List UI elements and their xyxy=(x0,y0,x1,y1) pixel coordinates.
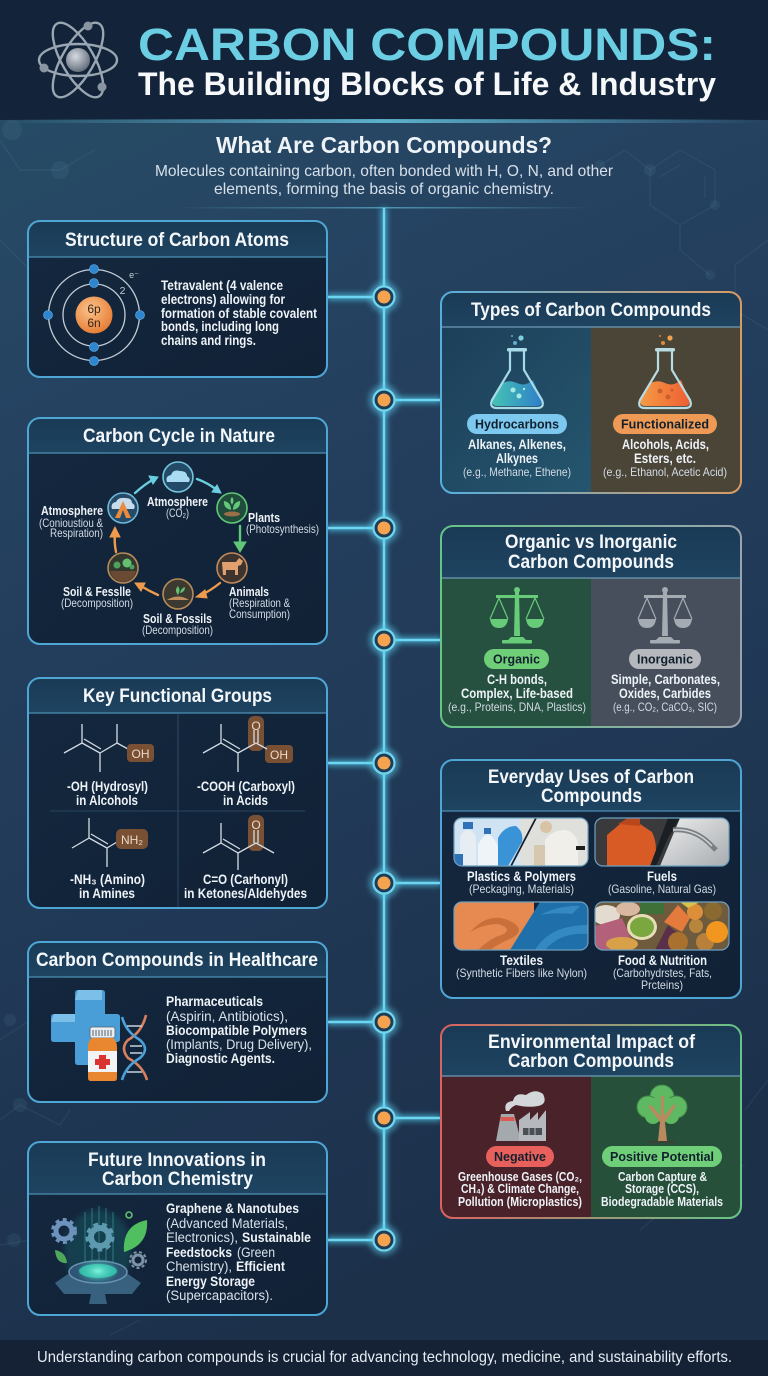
hydrocarbons column: Alkynes xyxy=(496,451,538,466)
amino structure: NH₂ xyxy=(121,833,143,847)
amino structure xyxy=(72,818,148,867)
panel: environmental impact xyxy=(441,1025,741,1218)
heading: Carbon Cycle in Nature xyxy=(83,426,275,447)
cycle labels: Soil & Fesslle xyxy=(63,585,131,599)
description: (Implants, Drug Delivery), xyxy=(166,1037,312,1052)
positive column: Storage (CCS), xyxy=(625,1182,699,1196)
positive column: Biodegradable Materials xyxy=(601,1195,723,1209)
icon: combustion xyxy=(108,493,138,523)
subtitle: The Building Blocks of Life & Industry xyxy=(138,66,716,102)
group labels: in Amines xyxy=(79,886,135,901)
cycle labels: Atmosphere xyxy=(41,504,103,518)
heading: Environmental Impact of xyxy=(488,1032,696,1053)
intro block: Molecules containing carbon, often bonded with H, O, N, and other xyxy=(155,163,614,180)
description: bonds, including long xyxy=(161,319,279,334)
footer: Understanding carbon compounds is crucial for advancing technology, medicine, and sustainability efforts. xyxy=(37,1349,732,1366)
negative column: Negative xyxy=(494,1149,546,1164)
carbonyl structure: O xyxy=(251,818,261,832)
organic column: Complex, Life-based xyxy=(461,686,573,701)
heading: Carbon Compounds xyxy=(508,1051,674,1072)
cycle labels: (Decomposition) xyxy=(142,623,213,637)
image: textiles xyxy=(454,902,588,950)
heading xyxy=(505,532,677,573)
functionalized column: (e.g., Ethanol, Acetic Acid) xyxy=(603,465,727,479)
icon: carbon atom diagram: 6n xyxy=(87,316,101,330)
description: Diagnostic Agents. xyxy=(166,1051,275,1066)
inorganic column: (e.g., CO₂, CaCO₃, SIC) xyxy=(613,700,717,714)
carbonyl structure xyxy=(203,815,274,870)
use labels: Food & Nutrition xyxy=(618,953,707,968)
panel: carbon cycle in nature xyxy=(28,418,327,644)
icon: atmosphere cloud xyxy=(163,462,193,492)
hydroxyl structure: OH xyxy=(132,747,150,761)
icon: factory xyxy=(496,1091,546,1141)
positive column: Carbon Capture & xyxy=(618,1170,707,1184)
positive column: Positive Potential xyxy=(610,1149,714,1164)
description: Tetravalent (4 valence xyxy=(161,278,283,293)
icon: grey scales xyxy=(638,587,692,644)
footer xyxy=(0,1340,768,1376)
use labels: Textiles xyxy=(500,953,543,968)
icon: futuristic reactor xyxy=(52,1206,147,1304)
organic column xyxy=(448,649,586,714)
use labels: Plastics & Polymers xyxy=(467,869,576,884)
description: formation of stable covalent xyxy=(161,306,317,321)
group labels: C=O (Carhonyl) xyxy=(203,872,288,887)
heading xyxy=(488,767,694,807)
inorganic column: Simple, Carbonates, xyxy=(611,672,720,687)
description: chains and rings. xyxy=(161,333,256,348)
panel: key functional groups xyxy=(28,678,327,908)
timeline connector xyxy=(327,208,441,1255)
functionalized column: Functionalized xyxy=(621,416,709,432)
intro block xyxy=(155,132,614,208)
description: Pharmaceuticals xyxy=(166,994,263,1009)
heading: Everyday Uses of Carbon xyxy=(488,767,694,788)
carboxyl structure: O xyxy=(251,719,261,733)
use labels: (Gasoline, Natural Gas) xyxy=(608,882,716,896)
heading: Carbon Compounds in Healthcare xyxy=(36,950,318,971)
carboxyl structure: OH xyxy=(270,748,288,762)
panel: everyday uses xyxy=(441,760,741,998)
heading: Future Innovations in xyxy=(88,1150,266,1171)
description: electrons) allowing for xyxy=(161,292,286,307)
cycle labels: Animals xyxy=(229,585,269,599)
heading: Structure of Carbon Atoms xyxy=(65,230,289,251)
icon: carbon atom diagram xyxy=(44,264,144,366)
cycle labels: Soil & Fossils xyxy=(143,612,212,626)
icon: carbon atom diagram: 6p xyxy=(87,302,101,316)
title: CARBON COMPOUNDS: xyxy=(138,19,716,70)
use labels: (Peckaging, Materials) xyxy=(469,882,574,896)
organic column: Organic xyxy=(493,652,540,666)
negative column: Greenhouse Gases (CO₂, xyxy=(458,1170,582,1184)
description: (Supercapacitors). xyxy=(166,1288,273,1303)
negative column: Pollution (Microplastics) xyxy=(458,1195,582,1209)
icon: plants xyxy=(217,493,247,523)
icon: orange flask xyxy=(639,335,691,408)
description: Graphene & Nanotubes xyxy=(166,1201,299,1216)
description: (Advanced Materials, xyxy=(166,1216,288,1231)
description: Chemistry), xyxy=(166,1259,232,1274)
panel: carbon compounds in healthcare xyxy=(28,942,327,1102)
hydrocarbons column: (e.g., Methane, Ethene) xyxy=(463,465,571,479)
icon: soil and fossils xyxy=(163,579,193,609)
intro block: elements, forming the basis of organic chemistry. xyxy=(214,181,554,198)
hydrocarbons column: Hydrocarbons xyxy=(475,416,559,432)
negative column xyxy=(458,1146,582,1209)
panel: future innovations xyxy=(28,1142,327,1315)
use labels xyxy=(456,869,716,992)
intro block: What Are Carbon Compounds? xyxy=(216,132,552,158)
inorganic column: Inorganic xyxy=(637,652,693,666)
panel: types of carbon compounds xyxy=(441,292,741,493)
positive column xyxy=(601,1146,723,1209)
cycle labels: Plants xyxy=(248,511,280,525)
description: Electronics), xyxy=(166,1230,238,1245)
icon: medicine and dna xyxy=(51,990,147,1081)
heading: Compounds xyxy=(541,786,642,807)
inorganic column: Oxides, Carbides xyxy=(619,686,711,701)
cycle labels: (CO₂) xyxy=(166,506,189,520)
description xyxy=(161,278,317,348)
icon: animals xyxy=(217,553,247,583)
description: Feedstocks xyxy=(166,1245,232,1260)
cycle labels: Atmosphere xyxy=(147,495,208,509)
use labels: (Carbohydrstes, Fats, xyxy=(613,966,712,980)
icon: soil with sprouts xyxy=(108,553,138,583)
heading: Organic vs Inorganic xyxy=(505,532,677,553)
group labels: -COOH (Carboxyl) xyxy=(197,779,295,794)
use labels: Prcteins) xyxy=(641,978,683,992)
heading: Key Functional Groups xyxy=(83,686,272,707)
icon: tree xyxy=(637,1085,687,1142)
functionalized column: Alcohols, Acids, xyxy=(622,437,709,452)
group labels: in Alcohols xyxy=(76,793,138,808)
heading xyxy=(88,1150,266,1190)
use labels: (Synthetic Fibers like Nylon) xyxy=(456,966,587,980)
carboxyl structure xyxy=(203,716,293,772)
negative column: CH₄) & Climate Change, xyxy=(461,1182,579,1196)
header band xyxy=(0,0,768,123)
use labels: Fuels xyxy=(647,869,677,884)
cycle labels xyxy=(39,495,319,637)
description: (Aspirin, Antibiotics), xyxy=(166,1009,288,1024)
heading: Types of Carbon Compounds xyxy=(471,300,711,321)
description: Energy Storage xyxy=(166,1274,255,1289)
heading xyxy=(488,1032,696,1072)
functionalized column: Esters, etc. xyxy=(634,451,696,466)
icon: atom xyxy=(39,16,117,104)
icon: carbon atom diagram: 2 xyxy=(120,285,126,297)
group labels: -NH₃ (Amino) xyxy=(70,872,145,887)
hydroxyl structure xyxy=(64,724,154,772)
group labels: in Ketones/Aldehydes xyxy=(184,886,307,901)
image: fuels xyxy=(595,818,729,866)
cycle labels: Respiration) xyxy=(50,526,103,540)
description xyxy=(166,1201,311,1303)
functionalized column xyxy=(603,414,727,479)
description: Sustainable xyxy=(242,1230,311,1245)
image: plastics xyxy=(454,818,588,866)
icon: blue flask xyxy=(491,335,543,408)
organic column: C-H bonds, xyxy=(487,672,547,687)
heading: Carbon Compounds xyxy=(508,552,674,573)
description: Efficient xyxy=(236,1259,285,1274)
hydrocarbons column: Alkanes, Alkenes, xyxy=(468,437,566,452)
cycle labels: (Conioustiou & xyxy=(39,516,103,530)
cycle arrows xyxy=(110,476,246,598)
cycle labels: (Decomposition) xyxy=(61,596,133,610)
group labels: in Acids xyxy=(223,793,268,808)
icon: green scales xyxy=(490,587,544,644)
heading: Carbon Chemistry xyxy=(102,1169,253,1190)
cycle labels: (Photosynthesis) xyxy=(246,522,319,536)
description: (Green xyxy=(237,1245,275,1260)
panel: structure of carbon atoms xyxy=(28,221,327,377)
group labels: -OH (Hydrosyl) xyxy=(67,779,148,794)
group labels xyxy=(67,779,307,901)
hydrocarbons column xyxy=(463,414,571,479)
icon: carbon atom diagram: e⁻ xyxy=(129,270,139,280)
image: food xyxy=(592,902,729,952)
description xyxy=(166,994,312,1066)
organic column: (e.g., Proteins, DNA, Plastics) xyxy=(448,700,586,714)
cycle labels: Consumption) xyxy=(229,607,290,621)
description: Biocompatible Polymers xyxy=(166,1023,307,1038)
cycle labels: (Respiration & xyxy=(229,596,290,610)
panel: organic vs inorganic xyxy=(441,526,741,727)
inorganic column xyxy=(611,649,720,714)
